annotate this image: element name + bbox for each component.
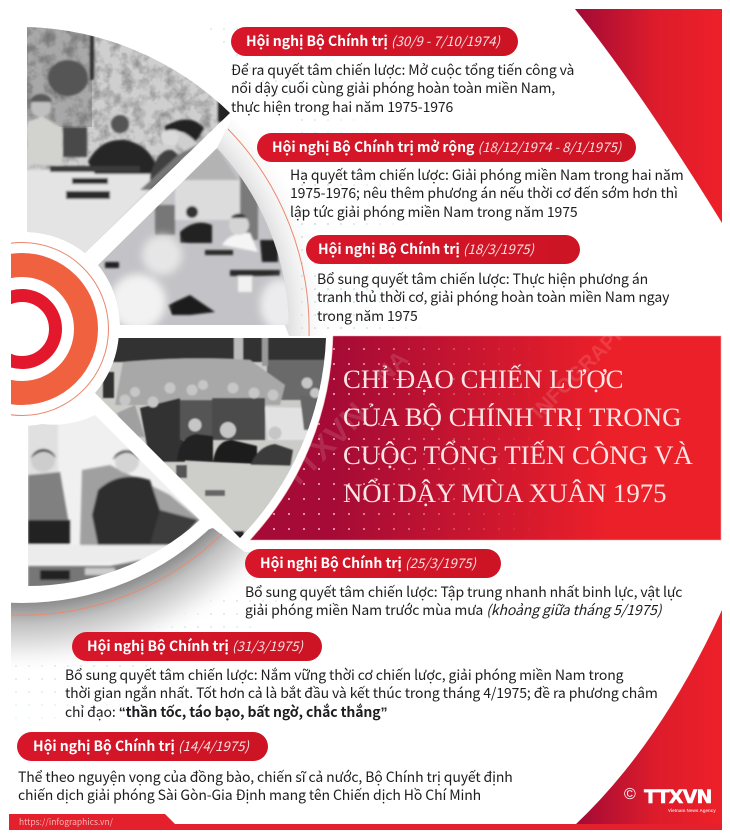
heading: main title: NỔI DẬY MÙA XUÂN 1975: [343, 478, 667, 508]
text: conference 5: Bổ sung quyết tâm chiến lược: Nắm vững thời cơ chiến lược, giải phóng miền Nam trong: [65, 665, 623, 685]
text: conference 4: giải phóng miền Nam trước mùa mưa (khoảng giữa tháng 5/1975): [245, 600, 661, 620]
text: conference 5: [65, 665, 658, 722]
text: conference 1: thực hiện trong hai năm 1975-1976: [231, 97, 453, 117]
footer url: https://infographics.vn/: [19, 816, 113, 828]
pill: conference 31/3/1975: Hội nghị Bộ Chính trị (31/3/1975): [87, 636, 303, 656]
title banner background: INFOGRAPHICS: [527, 293, 657, 424]
text: conference 3: Bổ sung quyết tâm chiến lược: Thực hiện phương án: [317, 269, 648, 289]
text: conference 3: [317, 269, 670, 326]
back row figures: [117, 395, 320, 462]
photo 1: meeting with wall map: [27, 27, 230, 253]
heading: main title: CỦA BỘ CHÍNH TRỊ TRONG: [343, 402, 681, 432]
pill: conference 14/4/1975: [17, 732, 268, 761]
text: conference 5: thời gian ngắn nhất. Tốt hơn cả là bắt đầu và kết thúc trong tháng 4/1975; đề ra phương châm: [65, 683, 658, 703]
pill: conference 18/12/1974 - 8/1/1975: Hội nghị Bộ Chính trị mở rộng (18/12/1974 - 8/1/1975): [272, 137, 621, 157]
pill: conference 30/9 - 7/10/1974: [231, 27, 518, 56]
red corner bottom right: [575, 610, 722, 825]
logo: TTXVN: Vietnam News Agency: [668, 808, 716, 813]
title banner background: TTXVN: [274, 395, 374, 495]
pill: conference 25/3/1975: [245, 549, 501, 578]
text: conference 1: [231, 60, 574, 117]
logo: TTXVN: ©: [624, 786, 636, 803]
pill: conference 18/12/1974 - 8/1/1975: [257, 133, 636, 162]
text: conference 3: trong năm 1975: [317, 306, 418, 326]
pill: conference 25/3/1975: Hội nghị Bộ Chính trị (25/3/1975): [260, 553, 476, 573]
thin orange arc lower: [11, 534, 222, 615]
red corner top right: [575, 9, 722, 223]
text: conference 2: Hạ quyết tâm chiến lược: Giải phóng miền Nam trong hai năm: [290, 165, 684, 185]
grey glow lower arc: [11, 528, 370, 680]
logo: TTXVN: TTXVN: [644, 786, 712, 808]
text: conference 2: 1975-1976; nêu thêm phương án nếu thời cơ đến sớm hơn thì: [290, 183, 678, 203]
logo: TTXVN: [624, 786, 716, 813]
title banner background: NA: [370, 346, 414, 389]
text: conference 2: [290, 165, 684, 222]
dotted backdrop around the photos: [15, 28, 420, 719]
photo 4: general at the map table: [28, 415, 200, 586]
text: conference 4: [245, 582, 682, 620]
text: conference 3: tranh thủ thời cơ, giải phóng hoàn toàn miền Nam ngay: [317, 287, 669, 307]
pill: conference 30/9 - 7/10/1974: Hội nghị Bộ Chính trị (30/9 - 7/10/1974): [246, 31, 500, 51]
pill: conference 18/3/1975: [306, 235, 580, 264]
pill: conference 31/3/1975: [72, 632, 322, 661]
concentric target circles: [11, 242, 119, 426]
text: conference 4: Bổ sung quyết tâm chiến lược: Tập trung nhanh nhất binh lực, vật lực: [245, 582, 682, 602]
text: conference 6: Thể theo nguyện vọng của đồng bào, chiến sĩ cả nước, Bộ Chính trị quyết định: [18, 767, 513, 787]
photo 3: group portrait in the forest: [90, 336, 335, 541]
text: conference 1: Để ra quyết tâm chiến lược: Mở cuộc tổng tiến công và: [231, 60, 574, 80]
title banner background: [250, 336, 722, 540]
pill: conference 18/3/1975: Hội nghị Bộ Chính trị (18/3/1975): [318, 239, 534, 259]
white band under lower photo: [11, 528, 242, 603]
text: conference 1: nổi dậy cuối cùng giải phóng hoàn toàn miền Nam,: [231, 78, 555, 98]
text: conference 6: [18, 767, 513, 805]
pill: conference 14/4/1975: Hội nghị Bộ Chính trị (14/4/1975): [33, 736, 249, 756]
text: conference 2: lập tức giải phóng miền Nam trong năm 1975: [290, 202, 578, 222]
heading: main title: CHỈ ĐẠO CHIẾN LƯỢC: [343, 364, 624, 394]
footer red bar: [9, 814, 722, 830]
photo 2: meeting table: [98, 148, 288, 325]
heading: main title: [343, 364, 693, 570]
text: conference 6: chiến dịch giải phóng Sài Gòn-Gia Định mang tên Chiến dịch Hồ Chí Minh: [18, 785, 481, 805]
thin orange arc upper: [228, 129, 309, 336]
grey glow upper arc: [217, 118, 332, 336]
text: conference 5: chỉ đạo: “thần tốc, táo bạo, bất ngờ, chắc thắng”: [65, 702, 387, 722]
heading: main title: CUỘC TỔNG TIẾN CÔNG VÀ: [343, 440, 693, 470]
